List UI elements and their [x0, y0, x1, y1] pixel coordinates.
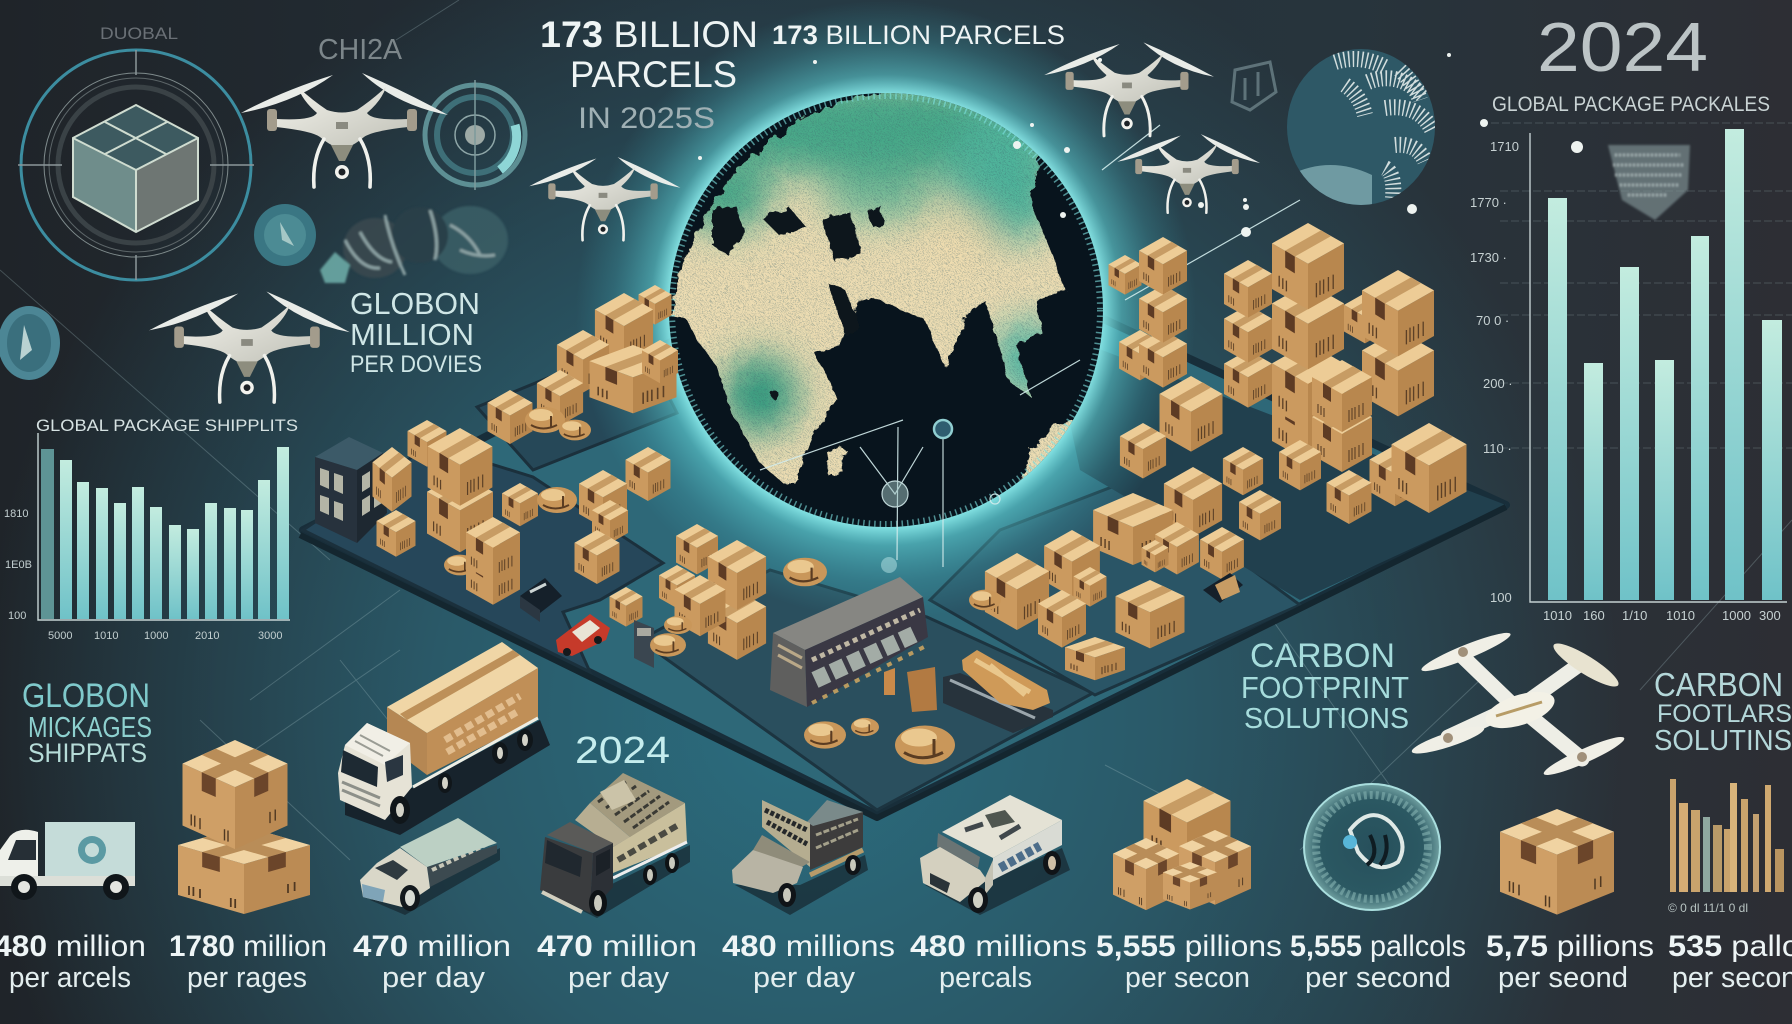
red car	[556, 614, 610, 656]
drone 4	[1044, 42, 1214, 136]
icon: left disc	[0, 306, 60, 380]
text: globon mickages shippats: SHIPPATS	[28, 738, 147, 768]
icon: single parcel	[1500, 809, 1614, 915]
title: 173 billion parcels: 173 BILLION PARCELS	[772, 20, 1065, 50]
stat labels: second line: per arcels	[9, 962, 131, 994]
text: globon million	[350, 286, 482, 378]
icon: small tag sketch	[1232, 62, 1276, 110]
stat labels: first line: 5,555 pillions	[1096, 930, 1282, 963]
left bar chart: 1E0B	[5, 559, 32, 571]
title: 173 billion parcels	[540, 14, 1065, 135]
left lower parcel cluster	[372, 420, 766, 660]
faded labels top-left: CHI2A	[318, 34, 403, 66]
right bar chart: 1010	[1543, 608, 1572, 623]
text: globon million: MILLION	[350, 317, 474, 352]
right tower parcel stacks	[1108, 223, 1466, 513]
stat labels: second line: per day	[568, 962, 670, 994]
sketch cluster	[320, 206, 508, 283]
text: carbon right: CARBON	[1654, 666, 1783, 703]
icon: three parcels	[1113, 779, 1251, 910]
globe	[650, 70, 1300, 573]
right bar chart: 1770 ·	[1470, 195, 1507, 210]
text: 2024 center: 2024	[575, 730, 670, 772]
icon: dark truck	[540, 773, 690, 918]
stat labels: first line	[0, 930, 1792, 963]
drone 1	[241, 73, 448, 187]
right bar chart: 1730 ·	[1470, 250, 1507, 265]
scattered dots	[698, 53, 1583, 237]
text: globon million: GLOBON	[350, 286, 480, 321]
stat labels: second line: per second	[1305, 962, 1451, 994]
stat labels: first line: 1780 million	[169, 930, 327, 963]
drone 2	[529, 157, 680, 240]
icon: white van	[920, 795, 1070, 915]
stat labels: second line: per day	[382, 962, 486, 994]
stat labels: second line: per secon	[1125, 962, 1250, 994]
text: globon mickages shippats	[22, 677, 152, 768]
left bar chart: 1000	[144, 630, 168, 642]
stat labels: second line: per day	[753, 962, 856, 994]
icon: teal disc	[254, 204, 316, 266]
icon: car	[360, 818, 500, 915]
drone 5	[1117, 134, 1260, 213]
right bar chart: 110 ·	[1483, 441, 1512, 456]
right bar chart: 1710	[1490, 139, 1519, 154]
title: 173 billion parcels: PARCELS	[570, 54, 737, 95]
inland seas	[712, 205, 884, 399]
icon: stacked parcels	[178, 740, 310, 914]
small dark machine	[520, 578, 562, 622]
flatbed with cargo	[943, 650, 1053, 733]
text: carbon footprint solutions: SOLUTIONS	[1244, 703, 1409, 735]
text: carbon footprint solutions: CARBON	[1250, 637, 1395, 675]
stat labels: second line	[9, 962, 1792, 994]
chart title: GLOBAL PACKAGE PACKALES	[1492, 93, 1770, 116]
stat labels: first line: 5,555 pallcols	[1290, 930, 1466, 963]
icon: package in target ring	[18, 50, 254, 280]
stat labels: second line: percals	[939, 962, 1032, 994]
left bar chart: 5000	[48, 630, 72, 642]
icon: small truck	[732, 800, 868, 915]
icon: radar ring	[425, 80, 525, 190]
text: carbon right	[1654, 666, 1792, 757]
text: globon mickages shippats: GLOBON	[22, 677, 150, 715]
stat labels: first line: 535 pallo	[1668, 930, 1792, 963]
faded labels top-left	[100, 24, 403, 66]
right bar chart: 300	[1759, 608, 1781, 623]
right bar chart: 1010	[1666, 608, 1695, 623]
stat labels: first line: 470 million	[353, 930, 511, 963]
title: 173 billion parcels: 173 BILLION	[540, 14, 758, 55]
continents	[671, 93, 1073, 484]
text: carbon right: FOOTLARS	[1657, 700, 1792, 728]
right bar chart	[1470, 8, 1792, 623]
right bar chart: 200 ·	[1483, 376, 1513, 391]
right bar chart: 1/10	[1622, 608, 1647, 623]
right bar chart: 100	[1490, 590, 1512, 605]
right bar chart: 70 0 ·	[1476, 313, 1509, 328]
stat labels: first line: 470 million	[537, 930, 697, 963]
left bar chart	[4, 416, 298, 642]
text: carbon footprint solutions	[1241, 637, 1409, 735]
stat labels: first line: 5,75 pillions	[1486, 930, 1654, 963]
icon: large truck	[338, 642, 550, 835]
chart title: GLOBAL PACKAGE SHIPPLITS	[36, 416, 298, 435]
left bar chart: 1810	[4, 508, 28, 520]
speckled rim	[672, 96, 1100, 524]
connection lines and nodes	[760, 125, 1300, 573]
large drone	[1410, 628, 1627, 780]
mini bar chart	[1668, 779, 1784, 915]
left upper parcel cluster	[488, 285, 678, 501]
text: globon million: PER DOVIES	[350, 351, 482, 378]
small dotted globe	[1287, 49, 1435, 210]
left bar chart: 1010	[94, 630, 118, 642]
icon: glass coin	[1304, 784, 1440, 910]
text: globon mickages shippats: MICKAGES	[28, 712, 152, 744]
stat labels: second line: per rages	[187, 962, 307, 994]
chart year: 2024	[1537, 8, 1708, 86]
warehouse	[770, 577, 928, 707]
forklift and small parcels mid	[634, 558, 955, 764]
faded labels top-left: DUOBAL	[100, 24, 178, 43]
right bar chart: 160	[1583, 608, 1605, 623]
text: carbon footprint solutions: FOOTPRINT	[1241, 670, 1409, 705]
left bar chart: 3000	[258, 630, 282, 642]
left bar chart: 100	[8, 610, 26, 622]
globe glow	[576, 0, 1196, 620]
stat labels: first line: 480 millions	[722, 930, 895, 963]
right bar chart: 1000	[1722, 608, 1751, 623]
texture map inset	[1608, 145, 1690, 220]
stat labels: first line: 480 millions	[910, 930, 1087, 963]
icon: white truck	[0, 822, 135, 900]
left bar chart: 2010	[195, 630, 219, 642]
icon: building	[315, 437, 387, 543]
mini bar chart: © 0 dl 11/1 0 dl	[1668, 901, 1748, 915]
drone 3	[149, 292, 350, 402]
panel: isometric platform	[300, 225, 1506, 818]
right lower parcel cluster	[969, 447, 1372, 680]
stat labels: second line: per seond	[1498, 962, 1628, 994]
title: 173 billion parcels: IN 2025S	[578, 102, 715, 135]
